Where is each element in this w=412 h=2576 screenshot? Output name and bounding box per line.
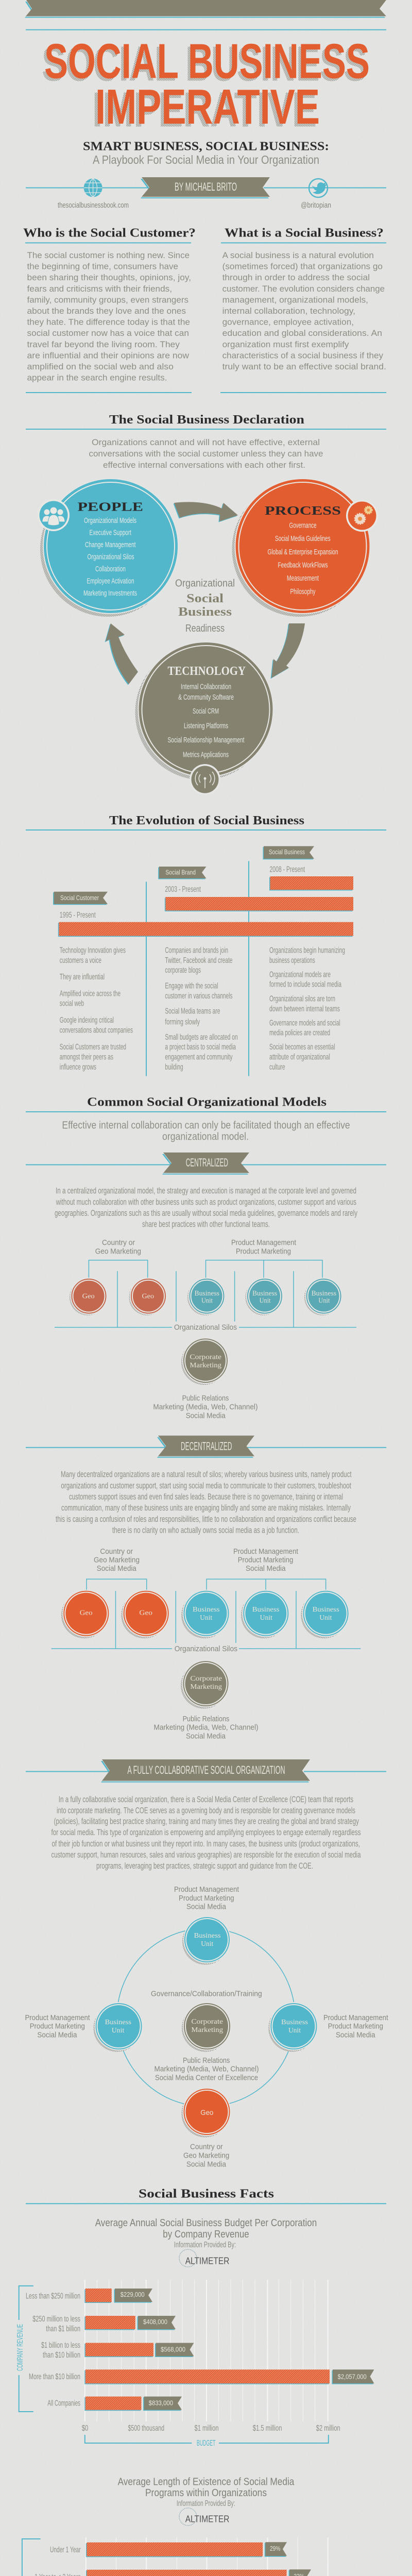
text block: social business: characteristics of a social business if they	[222, 350, 383, 360]
label: product marketing social media: Product Management	[233, 1547, 299, 1556]
org unit: geo: Geo	[80, 1609, 93, 1617]
label: geo marketing	[95, 1239, 141, 1256]
decentralized description	[56, 1469, 356, 1535]
label: top business unit	[174, 1885, 239, 1911]
org unit: right business unit	[268, 2003, 317, 2052]
column: social brand notes: forming slowly	[165, 1018, 200, 1026]
axis ticks: budget: $1.5 million	[253, 2424, 282, 2433]
text block: social customer: social customer now has a voice that can	[27, 328, 189, 338]
process items: Governance	[289, 521, 316, 530]
axis ticks: budget	[82, 2424, 340, 2433]
column: social business notes: media policies are created	[269, 1028, 330, 1038]
process items: Social Media Guidelines	[275, 534, 331, 543]
label: corporate functions: Public Relations	[182, 1394, 229, 1403]
people items: Executive Support	[90, 528, 132, 537]
label: product marketing social media	[233, 1547, 299, 1573]
label: geo marketing social media: Country or	[100, 1547, 133, 1556]
people items: Employee Activation	[87, 577, 134, 586]
column: social brand notes: corporate blogs	[165, 966, 201, 975]
org unit: business unit	[245, 1278, 283, 1315]
text block: social customer: they hate. The difference today is that the	[27, 317, 190, 327]
org unit: corporate marketing: Corporate	[190, 1675, 222, 1683]
icon: antenna	[190, 764, 220, 795]
org unit: business unit: Business	[252, 1290, 277, 1297]
label: geo marketing: Geo Marketing	[183, 2151, 229, 2160]
org unit: right business unit: Unit	[288, 2027, 301, 2035]
ribbon: decentralized	[158, 1435, 254, 1456]
text block: social customer	[27, 250, 191, 383]
technology items: Metrics Applications	[183, 750, 229, 759]
org unit: geo	[61, 1590, 109, 1638]
timeline: social customer	[54, 892, 353, 936]
org unit: right business unit: Business	[281, 2019, 308, 2026]
label: geo marketing: Social Media	[186, 2160, 227, 2168]
org unit: corporate marketing	[181, 1660, 229, 1708]
author ribbon	[142, 177, 270, 197]
org unit: business unit	[181, 1590, 230, 1638]
text block: social business: education and global considerations. An	[222, 328, 382, 338]
icon: people	[38, 499, 70, 531]
label: corporate functions: Social Media	[186, 1732, 226, 1740]
centralized description: share best practices with other functional teams.	[142, 1219, 270, 1229]
org unit: corporate marketing: Marketing	[191, 2026, 223, 2034]
org unit: business unit	[187, 1278, 225, 1315]
heading: social customer: Who is the Social Customer?	[23, 227, 196, 240]
org unit: business unit	[304, 1278, 342, 1315]
process items: Measurement	[287, 574, 319, 583]
technology items: Social Relationship Management	[168, 736, 245, 744]
people items: Organizational Silos	[88, 552, 134, 562]
models intro	[62, 1120, 350, 1142]
twitter label: @britopian	[301, 201, 331, 210]
label: product marketing	[231, 1239, 297, 1256]
column: social brand notes: building	[165, 1063, 183, 1072]
chart title: program length: Programs within Organizations	[145, 2487, 267, 2499]
text block: social customer: about the brands they love and the ones	[27, 306, 186, 316]
process items: Philosophy	[290, 587, 316, 596]
org unit: business unit: Unit	[200, 1614, 212, 1622]
arrow: technology to people	[106, 623, 138, 684]
ribbon: centralized: CENTRALIZED	[186, 1156, 228, 1169]
heading: evolution: The Evolution of Social Business	[109, 814, 304, 827]
models intro: Effective internal collaboration can only be facilitated though an effective	[62, 1120, 350, 1131]
label: geo marketing: Country or	[102, 1239, 135, 1247]
label: corporate functions	[154, 2056, 259, 2082]
column: social customer notes: customers a voice	[60, 956, 101, 965]
column: social brand notes: a project basis to social media	[165, 1043, 236, 1052]
text block: social customer: fears and criticisms with their friends,	[27, 284, 172, 294]
label: product marketing social media: Social Media	[246, 1564, 286, 1573]
panel: technology circle: TECHNOLOGY	[168, 665, 246, 678]
timeline: social brand	[159, 867, 353, 910]
bar: 250 million to 1 billion: than $1 billion	[46, 2325, 80, 2333]
bar: all companies: All Companies	[47, 2399, 80, 2408]
label: geo marketing social media	[94, 1547, 140, 1573]
label: right business unit	[323, 2013, 388, 2039]
ribbon: fully collaborative: A FULLY COLLABORATIVE SOCIAL ORGANIZATION	[127, 1764, 285, 1776]
text block: social customer: been sharing their thoughts, opinions, joy,	[27, 273, 191, 282]
timeline: social brand: 2003 - Present	[165, 885, 201, 894]
chart title: budget	[95, 2217, 317, 2249]
column: social brand notes: Small budgets are allocated on	[165, 1033, 238, 1042]
heading: organizational models: Common Social Organizational Models	[87, 1096, 327, 1109]
axis ticks: budget: $500 thousand	[128, 2424, 164, 2433]
title: IMPERATIVE	[95, 79, 320, 134]
axis ticks: budget: $2 million	[316, 2424, 340, 2433]
chart title: program length: Average Length of Existence of Social Media	[118, 2477, 295, 2488]
column: social customer notes: amongst their peers as	[60, 1053, 113, 1062]
text block: social business: organization must first exemplify	[222, 340, 349, 349]
text block: social customer: the beginning of time, consumers have	[27, 262, 178, 272]
org unit: business unit: Unit	[260, 1297, 271, 1304]
timeline: social business: Social Business	[269, 848, 305, 856]
column: social business notes: formed to include social media	[269, 980, 341, 989]
label: top business unit: Product Marketing	[179, 1894, 234, 1903]
icon: twitter bird	[309, 179, 328, 197]
logo: altimeter	[179, 2508, 229, 2526]
bar: 250 million to 1 billion: $408,000	[143, 2318, 167, 2326]
axis ticks: budget: $0	[82, 2424, 88, 2433]
text block: social customer: amplified on the social web and also	[27, 362, 174, 371]
column: social business notes: business operations	[269, 956, 315, 965]
column: social customer notes: conversations about companies	[60, 1026, 133, 1035]
label: geo marketing	[183, 2143, 229, 2168]
text block: social business: through in order to address the social	[222, 273, 370, 282]
top ribbon	[26, 0, 386, 16]
people items: Marketing Investments	[83, 589, 137, 598]
text block: social customer: are influential and their opinions are now	[27, 350, 190, 360]
panel: people circle: PEOPLE	[77, 501, 143, 514]
people items: Change Management	[85, 540, 136, 549]
org unit: business unit	[301, 1590, 349, 1638]
org unit: business unit: Unit	[319, 1614, 332, 1622]
chart title: program length: Information Provided By:	[177, 2499, 235, 2508]
bar: 250 million to 1 billion: $250 million to less	[32, 2315, 80, 2324]
bar chart: budget by revenue	[26, 2280, 374, 2421]
label: corporate functions	[153, 1715, 259, 1740]
column: social brand notes: engagement and community	[165, 1053, 233, 1062]
org unit: geo: Geo	[139, 1609, 152, 1617]
declaration intro	[89, 437, 323, 470]
bar: all companies: $833,000	[149, 2399, 173, 2406]
label: right business unit: Product Management	[323, 2013, 388, 2022]
label: corporate functions: Social Media Center of Excellence	[155, 2073, 258, 2082]
org unit: business unit: Business	[312, 1290, 336, 1297]
text block: social business: A social business is a natural evolution	[222, 250, 374, 260]
label: organizational silos: Organizational Silos	[175, 1645, 237, 1653]
label: geo marketing social media: Geo Marketing	[94, 1556, 140, 1565]
bar: more than 10 billion	[29, 2369, 374, 2383]
collaborative description	[52, 1794, 361, 1871]
people items: Collaboration	[95, 565, 126, 573]
bar: less than 250 million: $229,000	[121, 2291, 145, 2298]
panel: process circle	[232, 479, 378, 617]
bar: all companies	[47, 2397, 182, 2410]
column: social customer notes: Amplified voice across the	[60, 990, 121, 998]
org unit: business unit: Business	[195, 1290, 219, 1297]
declaration intro: Organizations cannot and will not have effective, external	[92, 437, 320, 447]
technology items: & Community Software	[178, 693, 234, 702]
label: corporate functions: Marketing (Media, Web, Channel)	[153, 1723, 259, 1732]
timeline: social customer: 1995 - Present	[60, 911, 96, 920]
label: corporate functions: Public Relations	[183, 1715, 229, 1723]
title	[42, 34, 370, 137]
label: corporate functions: Public Relations	[183, 2056, 230, 2065]
org unit: geo	[181, 2088, 231, 2137]
org unit: business unit: Business	[193, 1606, 219, 1614]
bar: less than 250 million: Less than $250 million	[26, 2292, 80, 2301]
panel: technology circle	[135, 642, 273, 795]
org unit: corporate marketing: Corporate	[191, 2018, 223, 2026]
column: social business notes	[269, 946, 345, 1072]
axis ticks: budget: $1 million	[195, 2424, 218, 2433]
chart title: program length	[118, 2477, 295, 2508]
chart title: budget: Information Provided By:	[174, 2241, 236, 2249]
column: social business notes: Governance models and social	[269, 1019, 340, 1027]
column: social customer notes: Technology Innovation gives	[60, 946, 126, 955]
org unit: corporate marketing: Corporate	[190, 1353, 221, 1361]
timeline: social business: 2008 - Present	[270, 866, 305, 874]
logo: altimeter: ALTIMETER	[185, 2256, 229, 2266]
center label: organizational social business readiness: Organizational	[175, 578, 235, 589]
tagline: A Playbook For Social Media in Your Organization	[93, 153, 319, 166]
axis label: budget: BUDGET	[197, 2439, 216, 2448]
org unit: left business unit: Business	[105, 2019, 131, 2026]
process items	[268, 521, 338, 596]
ribbon: centralized	[163, 1153, 249, 1173]
org unit: corporate marketing	[182, 2003, 231, 2052]
label: product marketing: Product Management	[231, 1239, 297, 1247]
column: social brand notes: Companies and brands join	[165, 946, 228, 955]
column: social business notes: Organizational silos are torn	[269, 995, 335, 1004]
icon: gears	[346, 500, 378, 532]
text block: social business: (sometimes forced) that organizations go	[222, 262, 383, 272]
bar: 1 billion to 10 billion: $1 billion to less	[41, 2341, 80, 2350]
label: organizational silos: Organizational Silos	[174, 1323, 237, 1332]
label: left business unit: Product Marketing	[30, 2022, 85, 2031]
ribbon: fully collaborative	[102, 1759, 310, 1781]
text block: social business: customer. The evolution considers change	[222, 284, 385, 294]
column: social customer notes: Social Customers are trusted	[60, 1043, 126, 1052]
declaration intro: effective internal conversations with each other first.	[103, 460, 305, 470]
process items: Global & Enterprise Expansion	[268, 548, 338, 556]
org unit: left business unit: Unit	[112, 2027, 124, 2035]
technology items	[168, 683, 245, 759]
label: corporate functions: Marketing (Media, Web, Channel)	[153, 1402, 258, 1412]
text block: social business: truly want to be an effective social brand.	[222, 362, 386, 371]
label: geo marketing: Geo Marketing	[95, 1247, 141, 1256]
org unit: business unit: Unit	[201, 1297, 213, 1304]
logo: altimeter	[179, 2249, 229, 2267]
bar: less than 250 million	[26, 2289, 152, 2302]
people items	[83, 516, 137, 598]
text block: social business: governance, employee activation,	[222, 317, 354, 327]
label: corporate functions: Marketing (Media, Web, Channel)	[154, 2065, 259, 2074]
column: social customer notes: Google indexing critical	[60, 1016, 114, 1025]
org unit: geo: Geo	[142, 1293, 154, 1300]
axis label: company revenue: COMPANY REVENUE	[16, 2324, 25, 2371]
org unit: top business unit	[182, 1917, 230, 1965]
bar: under 1 year: 29%	[270, 2545, 281, 2552]
author ribbon: BY MICHAEL BRITO	[175, 180, 237, 193]
centralized description	[55, 1186, 357, 1229]
label: right business unit: Product Marketing	[328, 2022, 383, 2031]
center label: organizational social business readiness: Social	[186, 592, 224, 605]
heading: social business: What is a Social Business?	[225, 227, 384, 240]
technology items: Social CRM	[193, 707, 219, 716]
org unit: geo	[129, 1278, 166, 1315]
column: social brand notes: customer in various channels	[165, 992, 233, 1001]
label: top business unit: Product Management	[174, 1885, 239, 1894]
people items: Organizational Models	[84, 516, 136, 525]
org unit: corporate marketing: Marketing	[190, 1683, 222, 1691]
column: social customer notes: social web	[60, 999, 84, 1008]
label: top business unit: Social Media	[186, 1903, 227, 1911]
column: social customer notes: They are influential	[60, 973, 105, 981]
column: social brand notes	[165, 946, 238, 1072]
column: social customer notes: influence grows	[60, 1063, 96, 1072]
panel: people circle	[38, 479, 178, 617]
logo: altimeter: ALTIMETER	[185, 2514, 229, 2524]
org unit: top business unit: Unit	[201, 1940, 213, 1948]
text block: social customer: The social customer is nothing new. Since	[27, 250, 190, 260]
bar: 1 billion to 10 billion	[41, 2341, 194, 2360]
column: social customer notes	[60, 946, 133, 1072]
bar: 1 billion to 10 billion: than $10 billion	[43, 2351, 80, 2360]
title: IMPERATIVE	[92, 82, 317, 137]
decentralized description: there is no clarity on who actually owns social media as a job function.	[112, 1525, 299, 1535]
arrow: people to process	[174, 502, 238, 521]
arrow: process to technology	[271, 623, 305, 678]
declaration intro: conversations with the social customer unless they can have	[89, 449, 323, 459]
timeline: social business	[264, 846, 353, 890]
technology items: Listening Platforms	[184, 721, 228, 730]
text block: social business	[222, 250, 386, 371]
bar: 250 million to 1 billion	[32, 2315, 176, 2333]
org unit: left business unit	[94, 2003, 143, 2052]
center label: organizational social business readiness: Readiness	[185, 623, 225, 634]
heading: facts: Social Business Facts	[139, 2188, 274, 2201]
label: left business unit: Product Management	[25, 2013, 90, 2022]
org unit: geo	[121, 1590, 169, 1638]
collaborative description: programs, leveraging best practices, strategic support and guidance from the COE.	[96, 1861, 313, 1871]
org unit: corporate marketing: Marketing	[190, 1362, 221, 1369]
text block: social business: management, organizational models,	[222, 295, 368, 304]
label: product marketing: Product Marketing	[236, 1247, 291, 1256]
bar: 1 billion to 10 billion: $568,000	[161, 2345, 185, 2353]
org unit: business unit: Business	[313, 1606, 339, 1614]
models intro: organizational model.	[162, 1131, 249, 1142]
column: social business notes: attribute of organizational	[269, 1053, 330, 1062]
text block: social customer: travel far beyond the living room. They	[27, 340, 180, 349]
text block: social customer: appear in the search engine results.	[27, 373, 167, 383]
panel: process circle: PROCESS	[265, 504, 341, 518]
org unit: top business unit: Business	[194, 1932, 221, 1940]
label: product marketing social media: Product Marketing	[238, 1556, 293, 1565]
bar chart: program length	[32, 2537, 328, 2576]
column: social brand notes: Twitter, Facebook and create	[165, 956, 233, 965]
bar: under 1 year	[50, 2542, 287, 2556]
org unit: business unit: Unit	[318, 1297, 330, 1304]
org unit: business unit: Unit	[260, 1614, 272, 1622]
text block: social business: internal collaboration, technology,	[222, 306, 355, 316]
chart title: budget: Average Annual Social Business Budget Per Corporation	[95, 2217, 317, 2229]
bar: more than 10 billion: $2,057,000	[338, 2372, 367, 2380]
icon: globe	[84, 178, 102, 197]
bar: under 1 year: Under 1 Year	[50, 2546, 81, 2554]
column: social business notes: Organizational models are	[269, 971, 331, 979]
column: social business notes: culture	[269, 1063, 285, 1072]
timeline: social brand: Social Brand	[165, 869, 196, 876]
subtitle: SMART BUSINESS, SOCIAL BUSINESS:	[83, 140, 329, 154]
label: left business unit	[25, 2013, 90, 2039]
bar: more than 10 billion: More than $10 billion	[29, 2372, 80, 2381]
technology items: Internal Collaboration	[181, 683, 231, 691]
label: left business unit: Social Media	[37, 2031, 77, 2039]
label: corporate functions	[153, 1394, 258, 1420]
org unit: geo: Geo	[200, 2108, 213, 2116]
bar: 1 to 2 years	[35, 2569, 311, 2576]
label: governance collaboration training: Governance/Collaboration/Training	[151, 1990, 262, 1998]
column: social brand notes: Social Media teams are	[165, 1007, 220, 1015]
label: corporate functions: Social Media	[186, 1411, 226, 1420]
column: social business notes: down between internal teams	[269, 1005, 340, 1013]
column: social brand notes: Engage with the social	[165, 982, 218, 990]
chart title: budget: by Company Revenue	[163, 2229, 249, 2240]
text block: social customer: family, community groups, even strangers	[27, 295, 188, 304]
heading: declaration: The Social Business Declaration	[109, 413, 304, 427]
center label: organizational social business readiness	[175, 578, 235, 634]
ribbon: decentralized: DECENTRALIZED	[181, 1440, 232, 1453]
column: social business notes: Organizations begin humanizing	[269, 946, 345, 955]
label: geo marketing: Country or	[190, 2143, 223, 2151]
label: right business unit: Social Media	[336, 2031, 375, 2039]
process items: Feedback WorkFlows	[278, 561, 328, 570]
org unit: business unit: Business	[252, 1606, 279, 1614]
org unit: geo	[70, 1278, 107, 1315]
org unit: corporate marketing	[181, 1338, 228, 1385]
label: geo marketing social media: Social Media	[97, 1564, 136, 1573]
column: social business notes: Social becomes an essential	[269, 1043, 335, 1052]
website label: thesocialbusinessbook.com	[58, 201, 129, 210]
org unit: business unit	[241, 1590, 289, 1638]
center label: organizational social business readiness: Business	[178, 605, 232, 619]
timeline: social customer: Social Customer	[60, 894, 99, 902]
org unit: geo: Geo	[82, 1293, 95, 1300]
